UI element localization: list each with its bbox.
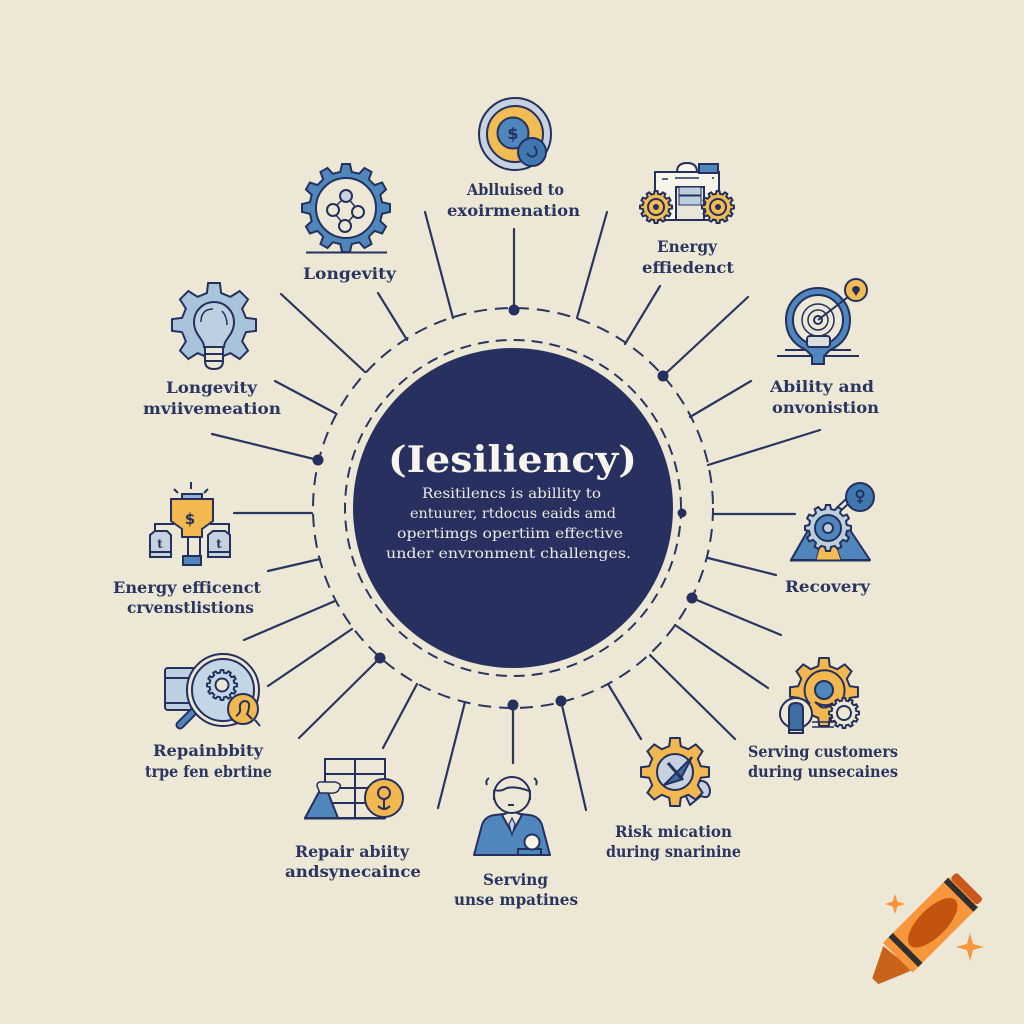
icon: coin ring — [479, 98, 551, 170]
icon: gear on mountains — [790, 483, 874, 560]
center title: (Iesiliency) — [388, 439, 637, 481]
label: longevity left: mviivemeation — [143, 399, 281, 418]
label: energy efficiency top: effiedenct — [642, 258, 735, 277]
center description — [386, 486, 631, 562]
icon: funnel with jars: t — [157, 537, 163, 551]
label: abllused: Ablluised to — [466, 180, 564, 199]
label: risk mitigation — [606, 822, 741, 861]
icon: target with pin — [777, 279, 867, 364]
label: longevity top: Longevity — [303, 264, 397, 283]
label: risk mitigation: during snarinine — [606, 842, 741, 861]
label: longevity left: Longevity — [166, 378, 258, 397]
icon: funnel with jars — [150, 482, 230, 565]
center description: under envronment challenges. — [386, 546, 631, 562]
ring node dots — [312, 304, 698, 710]
label: longevity left — [143, 378, 281, 418]
icon: service person — [474, 777, 550, 855]
label: repairability left: trpe fen ebrtine — [145, 762, 272, 781]
icon: gear with lightbulb — [172, 283, 256, 369]
label: serving bottom: unse mpatines — [454, 890, 578, 909]
label: serving bottom — [454, 870, 578, 909]
radial connector lines — [212, 212, 820, 810]
icon: gears with bulb — [780, 658, 859, 733]
outer dashed ring — [313, 308, 713, 708]
label: risk mitigation: Risk mication — [615, 822, 732, 841]
icon: funnel with jars: t — [216, 537, 222, 551]
label: serving customers — [748, 742, 898, 781]
label: energy efficiency left: Energy efficenct — [113, 578, 262, 597]
icon: crayon with sparkles — [860, 871, 985, 996]
central panel: resiliency — [353, 348, 673, 668]
label: serving bottom: Serving — [483, 870, 548, 889]
label: abllused — [447, 180, 580, 220]
label: ability and — [769, 377, 879, 417]
icon: funnel with jars: $ — [185, 510, 195, 528]
label: energy efficiency left — [113, 578, 262, 617]
label: repairability left: Repainbbity — [153, 741, 264, 760]
label: repairability bottom — [285, 842, 421, 881]
label: energy efficiency top — [642, 237, 735, 277]
label: abllused: exoirmenation — [447, 201, 580, 220]
icon: table with flask — [304, 759, 403, 818]
label: serving customers: during unsecaines — [748, 762, 898, 781]
icon: factory with gears — [640, 163, 734, 223]
center description: entuurer, rtdocus eaids amd — [410, 506, 616, 522]
label: serving customers: Serving customers — [748, 742, 898, 761]
icon: gear with compass — [641, 738, 710, 806]
label: recovery: Recovery — [785, 577, 871, 596]
center description: Resitilencs is abillity to — [422, 486, 601, 502]
label: energy efficiency left: crvenstlistions — [127, 598, 254, 617]
center description: opertimgs opertiim effective — [397, 526, 623, 542]
label: repairability bottom: Repair abiity — [295, 842, 410, 861]
label: ability and: Ability and — [769, 377, 874, 396]
label: energy efficiency top: Energy — [657, 237, 718, 256]
icon: coin ring: $ — [507, 124, 519, 143]
label: ability and: onvonistion — [772, 398, 879, 417]
label: repairability left — [145, 741, 272, 781]
inner dashed ring — [345, 340, 681, 676]
icon: gear with nodes — [302, 164, 390, 252]
icon: magnifier over screen — [165, 654, 260, 726]
label: repairability bottom: andsynecaince — [285, 862, 421, 881]
